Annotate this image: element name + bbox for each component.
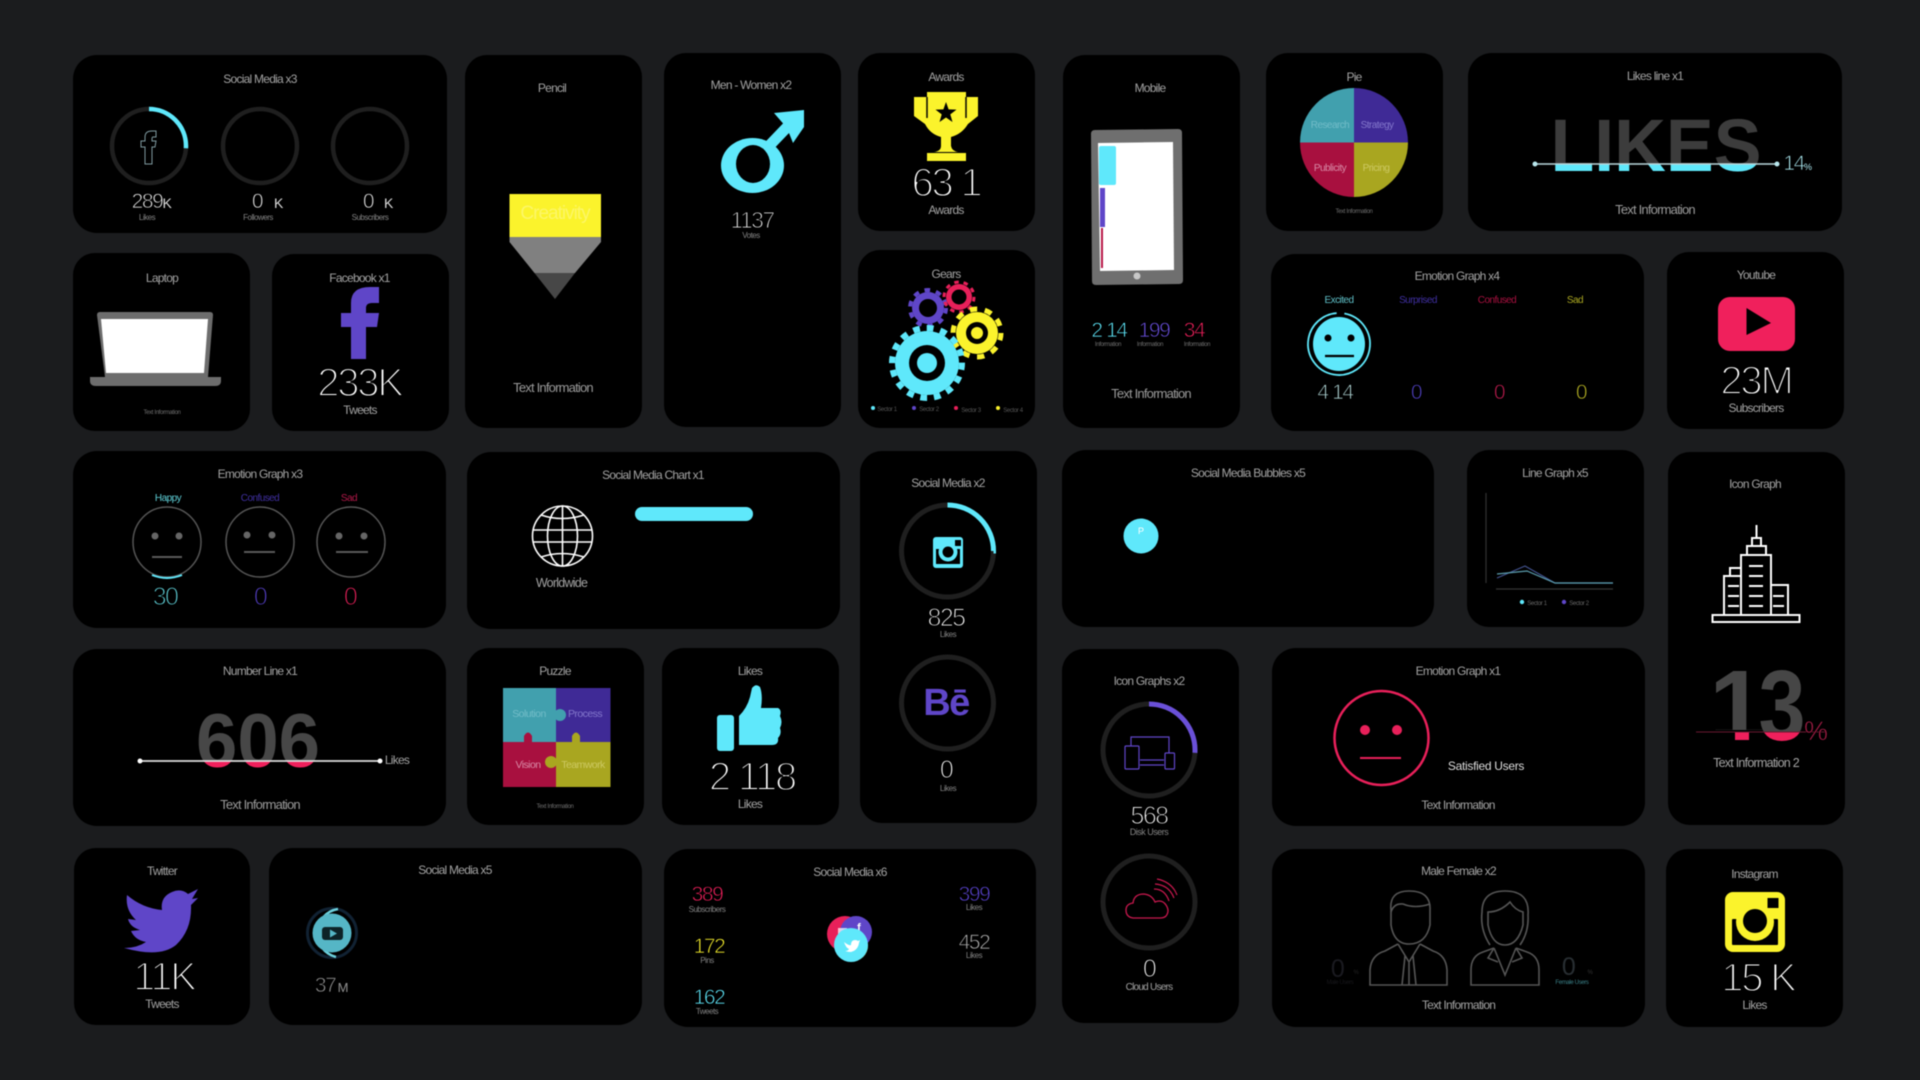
panel: Youtube — [1667, 252, 1844, 429]
legend — [871, 406, 1024, 414]
bubble — [1124, 518, 1158, 554]
panel: Social Media x3 — [73, 55, 447, 233]
icon: YouTube ring gauge — [308, 908, 356, 958]
icon: pencil — [510, 194, 601, 299]
stat: 0 K followers — [243, 190, 284, 222]
stat: male 0% — [1327, 955, 1360, 986]
stat: 199: 199 — [1139, 319, 1170, 342]
icon: thumbs up — [717, 685, 782, 751]
caption: Text Information — [1421, 798, 1495, 812]
heading: Social Media x3: Social Media x3 — [223, 72, 298, 86]
stat: female 0%: 0 — [1562, 953, 1575, 981]
stat: 452 likes: Likes — [966, 951, 983, 960]
values: 30 — [153, 583, 178, 611]
panel: Male Female x2 — [1272, 849, 1645, 1027]
panel: Awards — [858, 53, 1035, 231]
caption: Tweets: Tweets — [343, 403, 378, 417]
heading: Instagram: Instagram — [1731, 867, 1779, 881]
legend: Sector 4 — [1003, 408, 1024, 414]
icon: trophy — [914, 92, 978, 161]
heading: Likes: Likes — [738, 664, 763, 678]
panel: Social Media x2 — [860, 451, 1037, 823]
heading: Twitter: Twitter — [147, 864, 178, 878]
caption: Subscribers: Subscribers — [1728, 401, 1784, 415]
number fill gauge: 606: 606 — [196, 699, 320, 784]
panel: Men - Women x2 — [664, 53, 841, 427]
stat: 11K: 11K — [133, 955, 197, 999]
legend — [1520, 600, 1590, 607]
stat: male 0%: % — [1354, 970, 1360, 976]
icon: Twitter bird — [124, 889, 198, 952]
stat: 568 disk users: Disk Users — [1130, 827, 1169, 837]
heading: Youtube: Youtube — [1737, 268, 1776, 282]
caption: Text Information — [513, 380, 593, 395]
emotion labels: Surprised — [1399, 295, 1437, 306]
ring gauge: Instagram — [902, 505, 994, 597]
heading: Social Media x6: Social Media x6 — [813, 865, 888, 879]
values — [1317, 381, 1587, 404]
puzzle grid: Solution — [512, 708, 546, 720]
heading: Social Media x5: Social Media x5 — [418, 863, 493, 877]
stat: 289K likes: 289K — [132, 190, 172, 213]
stat: 399 likes: 399 — [959, 883, 990, 906]
values: 0 — [254, 583, 267, 611]
icon: pencil: Creativity — [520, 203, 591, 224]
ring gauge: Behance — [902, 657, 994, 749]
stat: female 0% — [1555, 953, 1594, 986]
ring gauge: devices — [1103, 704, 1195, 796]
ring gauge: followers — [223, 109, 297, 183]
stat: female 0%: Female Users — [1555, 980, 1589, 986]
panel: Emotion Graph x3 — [73, 451, 446, 628]
pie chart: Research — [1311, 120, 1349, 131]
heading: Emotion Graph x4: Emotion Graph x4 — [1415, 269, 1500, 283]
stat: 0 K followers: K — [274, 195, 284, 211]
emotion labels — [155, 493, 357, 504]
label: Satisfied Users: Satisfied Users — [1448, 759, 1524, 773]
heading: Laptop: Laptop — [146, 271, 179, 285]
heading: Social Media Chart x1: Social Media Chart x1 — [602, 468, 705, 482]
panel: Gears — [858, 250, 1035, 428]
caption: Likes: Likes — [738, 797, 763, 811]
percentage fill gauge: 13% — [1696, 670, 1828, 742]
panel: Puzzle — [467, 648, 644, 825]
bar — [635, 507, 753, 521]
panel: Social Media Chart x1 — [467, 452, 840, 629]
stat: 0 likes: Likes — [940, 784, 957, 793]
emotion labels: Sad — [1567, 295, 1583, 306]
heading: Pie: Pie — [1346, 70, 1363, 84]
label: Likes: Likes — [385, 753, 410, 767]
stat: 0 K subscribers: K — [384, 195, 394, 211]
stat: 1137 votes: Votes — [742, 231, 760, 240]
values: 0 — [1494, 381, 1505, 404]
icon: Instagram camera — [1725, 892, 1785, 952]
heading: Gears: Gears — [932, 267, 961, 281]
pie chart: Publicity — [1314, 163, 1347, 174]
icon: male symbol — [721, 110, 804, 193]
icon: sad face — [317, 507, 385, 577]
word fill gauge: LIKES: LIKES — [1550, 104, 1762, 187]
icon: purple gear — [910, 290, 946, 326]
emotion labels: Confused — [241, 493, 279, 504]
ring gauge: cloud — [1103, 856, 1195, 948]
puzzle grid: Teamwork — [561, 759, 606, 771]
number fill gauge: 606 — [136, 713, 384, 768]
stat: 568 disk users: 568 — [1131, 802, 1168, 830]
icon: skyscraper — [1712, 525, 1800, 622]
percentage fill gauge: 13%: % — [1804, 716, 1828, 746]
stat: 14%: 14% — [1783, 152, 1812, 175]
percentage fill gauge: 13%: 3 — [1758, 650, 1806, 762]
stat: 0 K subscribers: Subscribers — [352, 213, 389, 222]
caption: Text Information — [1111, 386, 1191, 401]
icon: overlapping social bubbles: f — [857, 922, 861, 934]
panel: Number Line x1 — [73, 649, 446, 826]
panel: Pie — [1266, 53, 1443, 231]
icon: laptop — [90, 312, 221, 386]
panel: Instagram — [1666, 849, 1843, 1027]
stat: 34: Information — [1184, 342, 1210, 348]
heading: Awards: Awards — [928, 70, 964, 84]
pie chart — [1300, 88, 1408, 197]
caption: Text Information — [143, 410, 181, 416]
icon: Facebook f — [341, 287, 379, 359]
icon: play button — [1718, 297, 1795, 351]
values: 0 — [344, 583, 357, 611]
stat: 15K: 15 K — [1721, 956, 1797, 1000]
values: 4 14 — [1317, 381, 1354, 404]
icon: globe — [532, 506, 592, 566]
heading: Facebook x1: Facebook x1 — [329, 271, 391, 285]
caption: Likes: Likes — [1742, 998, 1767, 1012]
emotion labels: Excited — [1325, 295, 1353, 306]
stat: 289K likes — [132, 190, 172, 222]
stat: 289K likes: Likes — [139, 213, 156, 222]
stat: 2118: 2 118 — [709, 755, 796, 799]
icon: excited face — [1303, 308, 1375, 380]
caption: Text Information — [220, 797, 300, 812]
heading: Mobile: Mobile — [1135, 81, 1166, 95]
stat: 37M: 37 M — [315, 974, 348, 997]
heading: Line Graph x5: Line Graph x5 — [1522, 466, 1589, 480]
panel: Mobile — [1063, 55, 1240, 428]
panel: Emotion Graph x4 — [1271, 254, 1644, 431]
stat: 1137 votes: 1137 — [730, 207, 774, 233]
icon: red gear — [944, 282, 974, 312]
icon: cyan gear — [892, 328, 962, 398]
legend: Sector 1 — [1527, 601, 1548, 607]
puzzle grid — [503, 688, 610, 787]
caption: Worldwide: Worldwide — [536, 576, 588, 590]
icon: male figure — [1370, 891, 1447, 985]
stat: 0 cloud users — [1126, 955, 1173, 993]
stat: 399 likes: Likes — [966, 903, 983, 912]
icon: tablet with bars — [1091, 129, 1183, 285]
heading: Men - Women x2: Men - Women x2 — [711, 78, 792, 92]
panel: Likes line x1 — [1468, 53, 1842, 231]
stat: 0 cloud users: Cloud Users — [1126, 982, 1173, 993]
stat: 214: Information — [1095, 342, 1121, 348]
heading: Puzzle: Puzzle — [539, 664, 572, 678]
caption: Text Information — [1335, 209, 1373, 215]
stat: 825 likes: Likes — [940, 630, 957, 639]
icon: yellow gear — [953, 309, 1001, 357]
stat: 0 likes — [940, 756, 957, 793]
values: 0 — [1411, 381, 1422, 404]
caption: Text Information — [1422, 998, 1495, 1012]
puzzle grid: Vision — [515, 759, 541, 771]
heading: Number Line x1: Number Line x1 — [223, 664, 298, 678]
stat: 452 likes: 452 — [959, 931, 990, 954]
stat: 34 — [1184, 319, 1210, 348]
stat: 23M: 23M — [1720, 359, 1792, 403]
stat: 214: 2 14 — [1091, 319, 1128, 342]
values: 0 — [1576, 381, 1587, 404]
panel: Social Media x6 — [664, 849, 1036, 1027]
heading: Emotion Graph x1: Emotion Graph x1 — [1416, 664, 1501, 678]
emotion labels — [1325, 295, 1583, 306]
stat: 631: 63 1 — [911, 161, 981, 205]
legend: Sector 2 — [1569, 601, 1590, 607]
stat: 0 K followers: Followers — [243, 213, 273, 222]
heading: Likes line x1: Likes line x1 — [1627, 69, 1684, 83]
stat: 162 tweets: 162 — [694, 986, 725, 1009]
heading: Pencil: Pencil — [538, 81, 566, 95]
stat: male 0%: 0 — [1331, 955, 1344, 983]
stat: 162 tweets: Tweets — [696, 1007, 719, 1016]
stat: female 0%: % — [1588, 970, 1594, 976]
percentage fill gauge: 13%: 1 — [1709, 650, 1765, 762]
stat: 0 K followers: 0 — [252, 190, 263, 213]
heading: Social Media x2: Social Media x2 — [911, 476, 986, 490]
legend: Sector 1 — [877, 407, 898, 413]
caption: Awards: Awards — [928, 203, 964, 217]
stat: 172 pins: Pins — [700, 956, 714, 965]
stat: 825 likes: 825 — [928, 604, 965, 632]
panel: Emotion Graph x1 — [1272, 648, 1645, 826]
bubble: P — [1138, 526, 1144, 536]
stat: 0 likes: 0 — [940, 756, 953, 784]
panel: Line Graph x5 — [1467, 450, 1644, 627]
ring gauge: likes — [112, 109, 186, 183]
panel: Icon Graphs x2 — [1062, 649, 1239, 1023]
heading: Emotion Graph x3: Emotion Graph x3 — [218, 467, 303, 481]
stat: 233K: 233K — [317, 361, 404, 405]
emotion labels: Sad — [341, 493, 357, 504]
panel: Laptop — [73, 253, 250, 431]
caption: Text Information — [536, 804, 574, 810]
icon: happy face — [133, 507, 201, 578]
puzzle grid: Process — [568, 708, 602, 720]
heading: Icon Graph: Icon Graph — [1729, 477, 1781, 491]
stat: 389 subscribers: 389 — [692, 883, 723, 906]
stat: 389 subscribers: Subscribers — [689, 905, 726, 914]
panel: Facebook x1 — [272, 254, 449, 431]
panel: Twitter — [74, 848, 250, 1025]
caption: Text Information 2 — [1713, 756, 1800, 770]
stat: 389 subscribers — [689, 883, 726, 914]
panel: Icon Graph — [1668, 452, 1845, 825]
caption: Tweets: Tweets — [145, 997, 180, 1011]
heading: Social Media Bubbles x5: Social Media Bubbles x5 — [1191, 466, 1306, 480]
pie chart: Pricing — [1363, 163, 1389, 174]
panel: Social Media Bubbles x5 — [1062, 450, 1434, 627]
percentage fill gauge: 13%: 3 — [1758, 650, 1806, 762]
heading: Male Female x2: Male Female x2 — [1421, 864, 1497, 878]
legend: Sector 3 — [961, 408, 982, 414]
stat: 34: 34 — [1184, 319, 1206, 342]
caption: Text Information — [1615, 202, 1695, 217]
stat: 172 pins: 172 — [694, 935, 725, 958]
ring gauge: subscribers — [333, 109, 407, 183]
pie chart: Strategy — [1361, 120, 1394, 131]
stat: 0 cloud users: 0 — [1143, 955, 1156, 983]
word fill gauge: LIKES: LIKES — [1550, 104, 1762, 187]
heading: Icon Graphs x2: Icon Graphs x2 — [1114, 674, 1186, 688]
stat: 0 K subscribers: 0 — [363, 190, 374, 213]
stat: 199: Information — [1137, 342, 1163, 348]
panel: Likes — [662, 648, 839, 825]
word fill gauge: LIKES — [1532, 118, 1780, 172]
stat: 0 K subscribers — [352, 190, 394, 222]
line chart — [1486, 493, 1613, 589]
number fill gauge: 606: 606 — [196, 699, 320, 784]
legend: Sector 2 — [919, 407, 940, 413]
panel: Pencil — [465, 55, 642, 428]
panel: Social Media x5 — [269, 848, 642, 1025]
icon: neutral face — [1334, 691, 1428, 785]
emotion labels: Confused — [1478, 295, 1516, 306]
icon: overlapping social bubbles — [827, 916, 872, 962]
ring gauge: Behance: Bē — [923, 682, 969, 724]
emotion labels: Happy — [155, 493, 182, 504]
icon: confused face — [226, 507, 294, 577]
stat: male 0%: Male Users — [1327, 980, 1354, 986]
icon: female figure — [1471, 891, 1539, 985]
values — [153, 583, 357, 611]
